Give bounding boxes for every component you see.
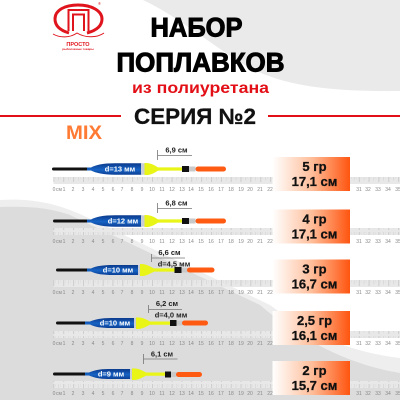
ruler 5: 20 (247, 391, 253, 397)
logo: ПРОСТО (66, 42, 90, 48)
subtitle: из полиуретана (132, 80, 269, 97)
ruler 2 (53, 228, 400, 245)
ruler 2: 21 (257, 239, 263, 245)
dimension 4: d=4,0 мм (155, 310, 188, 320)
ruler 5: 10 (149, 391, 155, 397)
weight box 2 (272, 210, 350, 244)
ruler 4 (53, 331, 400, 347)
ruler 4: 16 (208, 341, 214, 347)
ruler 1 (53, 177, 400, 193)
ruler 3: 5 (102, 290, 105, 296)
ruler 5: 16 (208, 391, 214, 397)
float 1: 5 g: d=13 мм (105, 165, 136, 174)
ruler 5: см (56, 391, 63, 397)
weight box 1 (272, 157, 350, 191)
ruler 1: 32 (365, 187, 371, 193)
ruler 1: 5 (102, 187, 105, 193)
ruler 4: 21 (257, 341, 263, 347)
ruler 1: 7 (121, 187, 124, 193)
ruler 5: 0 (53, 391, 56, 397)
ruler 5: 14 (188, 391, 194, 397)
ruler 3: 0 (53, 290, 56, 296)
ruler 2: 18 (228, 239, 234, 245)
ruler 5: 33 (375, 391, 381, 397)
ruler 3: 11 (159, 290, 165, 296)
ruler 3: 1 (63, 290, 66, 296)
ruler 4: 13 (179, 341, 185, 347)
float 5: 2 g (53, 368, 202, 380)
weight box 2: 4 гр (302, 212, 327, 226)
ruler 5: 15 (198, 391, 204, 397)
dimension 1: 6,9 см (165, 146, 188, 154)
ruler 5: 21 (257, 391, 263, 397)
ruler 3 (53, 280, 400, 296)
ruler 1: 1 (63, 187, 66, 193)
ruler 1: 16 (208, 187, 214, 193)
ruler 3: 3 (82, 290, 85, 296)
ruler 3: 33 (375, 290, 381, 296)
ruler 3: 32 (365, 290, 371, 296)
ruler 1: 19 (238, 187, 244, 193)
ruler 1: 0 (53, 187, 56, 193)
dimension 4: 6,2 см (156, 299, 179, 308)
ruler 2: 14 (188, 239, 194, 245)
ruler 4: 8 (131, 341, 134, 347)
ruler 2: 10 (149, 239, 155, 245)
weight box 3 (272, 260, 350, 294)
ruler 4: 14 (188, 341, 194, 347)
dimension 3 (152, 248, 191, 268)
ruler 1: 4 (92, 187, 95, 193)
ruler 5: 18 (228, 391, 234, 397)
ruler 1: 12 (169, 187, 175, 193)
ruler 5: 19 (238, 391, 244, 397)
ruler 4: 0 (53, 341, 56, 347)
ruler 2: 32 (365, 239, 371, 245)
ruler 2: 6 (112, 239, 115, 245)
float 4: 2.5 g: d=10 мм (100, 319, 131, 328)
ruler 1: 20 (247, 187, 253, 193)
ruler 1: 22 (267, 187, 273, 193)
ruler 2: 9 (141, 239, 144, 245)
ruler 2: 33 (375, 239, 381, 245)
ruler 2: 20 (247, 239, 253, 245)
ruler 4: 33 (375, 341, 381, 347)
ruler 4: 4 (92, 341, 95, 347)
ruler 2: 3 (82, 239, 85, 245)
ruler 5: 5 (102, 391, 105, 397)
ruler 2: 2 (72, 239, 75, 245)
ruler 4: 1 (63, 341, 66, 347)
ruler 1: 17 (218, 187, 224, 193)
ruler 2: 17 (218, 239, 224, 245)
weight box 1: 17,1 см (292, 174, 337, 189)
ruler 2: 8 (131, 239, 134, 245)
ruler 2: 4 (92, 239, 95, 245)
ruler 2: 1 (63, 239, 66, 245)
ruler 4: см (56, 341, 63, 347)
ruler 2: 11 (159, 239, 165, 245)
ruler 4: 32 (365, 341, 371, 347)
float 4: 2.5 g (56, 317, 208, 329)
ruler 5: 11 (159, 391, 165, 397)
ruler 2: 13 (179, 239, 185, 245)
background: bottom grey shape (0, 207, 400, 400)
series heading: СЕРИЯ №2 (134, 104, 256, 129)
ruler 3: 12 (169, 290, 175, 296)
weight box 4: 16,1 см (292, 328, 337, 343)
ruler 3: 21 (257, 290, 263, 296)
ruler 5: 4 (92, 391, 95, 397)
dimension 4 (148, 299, 188, 320)
float 2: 4 g: d=12 мм (108, 217, 139, 226)
ruler 1: 2 (72, 187, 75, 193)
ruler 3: 17 (218, 290, 224, 296)
ruler 3: 34 (385, 290, 391, 296)
ruler 1: 31 (356, 187, 362, 193)
ruler 4: 15 (198, 341, 204, 347)
float 3: 3 g (56, 264, 214, 276)
ruler 3: 13 (179, 290, 185, 296)
float 3: 3 g: d=10 мм (103, 266, 134, 275)
weight box 3: 16,7 см (292, 276, 337, 292)
title (116, 12, 284, 78)
ruler 5 (53, 381, 400, 397)
ruler 5: 34 (385, 391, 391, 397)
ruler 2: 15 (198, 239, 204, 245)
logo: ® (98, 1, 101, 6)
ruler 3: 19 (238, 290, 244, 296)
ruler 1: 34 (385, 187, 391, 193)
ruler 5: 6 (112, 391, 115, 397)
dimension 2 (158, 198, 192, 213)
ruler 1: 11 (159, 187, 165, 193)
dimension 2: 6,8 см (165, 198, 188, 208)
logo (53, 1, 104, 51)
weight box 5 (272, 361, 350, 395)
ruler 2: 34 (385, 239, 391, 245)
ruler 2: 12 (169, 239, 175, 245)
ruler 2: 5 (102, 239, 105, 245)
ruler 4: 6 (112, 341, 115, 347)
ruler 4: 20 (247, 341, 253, 347)
ruler 1: 18 (228, 187, 234, 193)
ruler 2: 7 (121, 239, 124, 245)
weight box 4 (272, 311, 350, 345)
ruler 4: 7 (121, 341, 124, 347)
ruler 2: 22 (267, 239, 273, 245)
weight box 4: 2,5 гр (297, 313, 332, 328)
dimension 5 (144, 350, 178, 364)
ruler 4: 17 (218, 341, 224, 347)
ruler 5: 13 (179, 391, 185, 397)
ruler 3: 31 (356, 290, 362, 296)
weight box 1: 5 гр (302, 159, 327, 174)
ruler 3: 20 (247, 290, 253, 296)
ruler 1: 10 (149, 187, 155, 193)
ruler 4: 12 (169, 341, 175, 347)
ruler 1: 21 (257, 187, 263, 193)
dimension 5: 6,1 см (151, 350, 174, 358)
ruler 1: 15 (198, 187, 204, 193)
ruler 3: 18 (228, 290, 234, 296)
ruler 5: 12 (169, 391, 175, 397)
title: НАБОР (150, 12, 242, 42)
ruler 3: 7 (121, 290, 124, 296)
MIX label: MIX (66, 123, 102, 144)
ruler 3: 16 (208, 290, 214, 296)
ruler 1: 8 (131, 187, 134, 193)
ruler 4: 31 (356, 341, 362, 347)
float 1: 5 g (52, 163, 226, 175)
ruler 2: 19 (238, 239, 244, 245)
logo: рыболовные товары (62, 47, 94, 51)
ruler 1: 13 (179, 187, 185, 193)
ruler 5: 2 (72, 391, 75, 397)
ruler 4: 3 (82, 341, 85, 347)
ruler 4: 2 (72, 341, 75, 347)
ruler 5: 31 (356, 391, 362, 397)
ruler 3: 4 (92, 290, 95, 296)
ruler 5: 8 (131, 391, 134, 397)
ruler 1: 14 (188, 187, 194, 193)
ruler 5: 3 (82, 391, 85, 397)
ruler 5: 32 (365, 391, 371, 397)
weight box 3: 3 гр (302, 262, 327, 276)
ruler 3: 2 (72, 290, 75, 296)
ruler 3: 15 (198, 290, 204, 296)
ruler 3: см (56, 290, 63, 296)
ruler 4: 5 (102, 341, 105, 347)
ruler 4: 19 (238, 341, 244, 347)
ruler 1: 9 (141, 187, 144, 193)
ruler 5: 22 (267, 391, 273, 397)
ruler 2: см (56, 239, 63, 245)
ruler 4: 11 (159, 341, 165, 347)
title: ПОПЛАВКОВ (116, 48, 284, 78)
ruler 3: 14 (188, 290, 194, 296)
ruler 4: 18 (228, 341, 234, 347)
dimension 1 (158, 146, 192, 160)
float 2: 4 g (53, 215, 226, 227)
ruler 2: 0 (53, 239, 56, 245)
ruler 3: 8 (131, 290, 134, 296)
ruler 5: 7 (121, 391, 124, 397)
ruler 3: 10 (149, 290, 155, 296)
ruler 1: 33 (375, 187, 381, 193)
ruler 2: 16 (208, 239, 214, 245)
background: bottom light band (0, 200, 400, 400)
ruler 3: 9 (141, 290, 144, 296)
ruler 5: 17 (218, 391, 224, 397)
float 5: 2 g: d=9 мм (98, 370, 125, 379)
ruler 4: 22 (267, 341, 273, 347)
ruler 4: 34 (385, 341, 391, 347)
background: top right grey shape (143, 0, 400, 91)
ruler 1: 3 (82, 187, 85, 193)
ruler 1: 6 (112, 187, 115, 193)
ruler 4: 9 (141, 341, 144, 347)
dimension 3: 6,6 см (158, 248, 181, 257)
ruler 1: см (56, 187, 63, 193)
ruler 3: 6 (112, 290, 115, 296)
dimension 3: d=4,5 мм (158, 260, 191, 268)
weight box 5: 2 гр (302, 363, 327, 378)
weight box 2: 17,1 см (292, 226, 337, 242)
ruler 4: 10 (149, 341, 155, 347)
ruler 3: 22 (267, 290, 273, 296)
ruler 5: 1 (63, 391, 66, 397)
weight box 5: 15,7 см (292, 378, 337, 393)
ruler 5: 9 (141, 391, 144, 397)
ruler 2: 31 (356, 239, 362, 245)
